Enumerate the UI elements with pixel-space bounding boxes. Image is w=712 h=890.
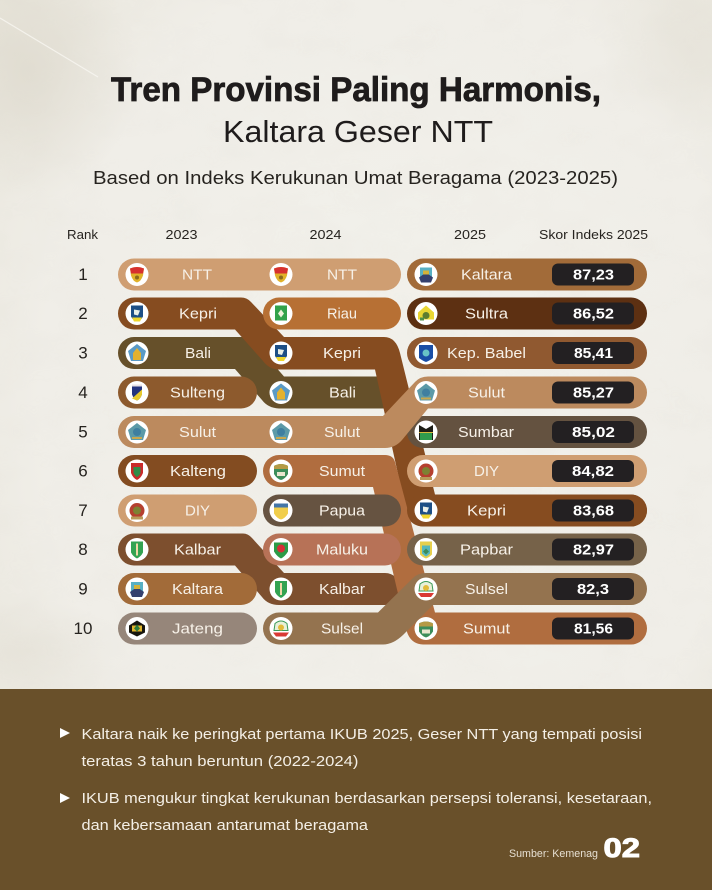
score badges: 85,41: [574, 346, 613, 362]
bullet note 1: Kaltara naik ke peringkat pertama IKUB 2025, Geser NTT yang tempati posisi: [82, 727, 642, 743]
score badges: 86,52: [573, 306, 614, 322]
score badges: 82,97: [573, 542, 614, 558]
column 2023: logos and names: Kalbar: [174, 542, 221, 558]
column 2025: logos and names: Papbar: [460, 542, 513, 558]
title: [111, 71, 601, 149]
panel: footer notes: [0, 689, 712, 890]
column 2025: logos and names: Sultra: [465, 306, 509, 322]
score badges: 83,68: [573, 504, 614, 520]
column 2025: logos and names: [414, 263, 526, 640]
connector: Sumut 2024 to 2025: [263, 455, 647, 644]
rank numbers: 8: [78, 540, 88, 559]
bullet note 2: dan kebersamaan antarumat beragama: [82, 818, 369, 834]
column 2024: logos and names: Kalbar: [319, 582, 365, 598]
column headers: [67, 228, 648, 242]
score badges: 84,82: [572, 464, 614, 480]
bullet note 2: [60, 791, 652, 834]
subtitle: Based on Indeks Kerukunan Umat Beragama (2023-2025): [93, 168, 618, 188]
column 2024: logos and names: NTT: [327, 268, 357, 284]
score badges: 81,56: [574, 622, 613, 638]
rank numbers: 2: [78, 304, 88, 323]
connector: Kalbar 2023 to 2024: [118, 534, 401, 605]
page number: 02: [604, 833, 640, 863]
bullet note 1: teratas 3 tahun beruntun (2022-2024): [82, 754, 358, 770]
column headers: 2025: [454, 228, 486, 242]
score badges: 85,02: [572, 425, 615, 441]
column 2024: logos and names: Riau: [327, 306, 357, 322]
title: Tren Provinsi Paling Harmonis,: [111, 71, 601, 109]
source: Sumber: Kemenag: [509, 848, 598, 860]
column headers: Skor Indeks 2025: [539, 228, 648, 242]
column headers: 2024: [310, 228, 342, 242]
bullet note 1: [60, 727, 642, 770]
column 2025: logos and names: Sumbar: [458, 425, 514, 441]
score badges: [552, 264, 634, 640]
rank numbers: 3: [78, 344, 88, 362]
column headers: Rank: [67, 228, 99, 242]
connector: Kepri 2023 to 2025: [118, 298, 647, 526]
column 2023: logos and names: Sulut: [179, 425, 216, 441]
column 2024: logos and names: Sumut: [319, 464, 365, 480]
column 2024: logos and names: Papua: [319, 504, 366, 520]
connector: Sulsel 2024 to 2025: [263, 573, 647, 644]
bullet note 2: IKUB mengukur tingkat kerukunan berdasarkan persepsi toleransi, kesetaraan,: [82, 791, 652, 807]
column 2023: logos and names: Bali: [185, 346, 211, 362]
rank numbers: [74, 265, 92, 638]
column headers: 2023: [166, 228, 198, 242]
column 2023: logos and names: [126, 263, 226, 640]
score badges: 85,27: [573, 386, 614, 402]
column 2025: logos and names: Sumut: [463, 622, 510, 638]
column 2025: logos and names: Sulut: [468, 386, 505, 402]
rank numbers: 4: [78, 383, 88, 402]
score badges: 82,3: [577, 582, 609, 598]
column 2023: logos and names: Sulteng: [170, 386, 225, 402]
column 2025: logos and names: Kepri: [467, 504, 506, 520]
column 2025: logos and names: Sulsel: [465, 582, 508, 598]
column 2024: logos and names: Maluku: [316, 542, 368, 558]
rank numbers: 5: [78, 422, 88, 442]
score badges: 87,23: [573, 268, 614, 284]
connector: Bali 2023 to 2024: [118, 337, 393, 408]
rank numbers: 1: [78, 265, 88, 284]
column 2025: logos and names: DIY: [474, 464, 499, 480]
column 2024: logos and names: Bali: [329, 386, 356, 402]
pills: plain ranks: [118, 258, 647, 644]
connector: Sulut 2023 to 2025: [118, 376, 647, 448]
column 2023: logos and names: DIY: [185, 504, 210, 520]
column 2024: logos and names: [270, 263, 368, 640]
column 2024: logos and names: Kepri: [323, 346, 361, 362]
column 2025: logos and names: Kaltara: [461, 268, 513, 284]
rank numbers: 10: [74, 619, 92, 638]
column 2024: logos and names: Sulut: [324, 425, 360, 441]
rank numbers: 7: [78, 501, 88, 520]
rank numbers: 9: [78, 580, 88, 598]
column 2023: logos and names: Jateng: [172, 622, 223, 638]
column 2023: logos and names: Kepri: [179, 306, 217, 322]
column 2024: logos and names: Sulsel: [321, 622, 363, 638]
column 2023: logos and names: Kaltara: [172, 582, 224, 598]
column 2025: logos and names: Kep. Babel: [447, 346, 526, 362]
rank numbers: 6: [78, 462, 88, 480]
column 2023: logos and names: Kalteng: [170, 464, 226, 480]
title: Kaltara Geser NTT: [223, 114, 493, 149]
column 2023: logos and names: NTT: [182, 268, 212, 284]
